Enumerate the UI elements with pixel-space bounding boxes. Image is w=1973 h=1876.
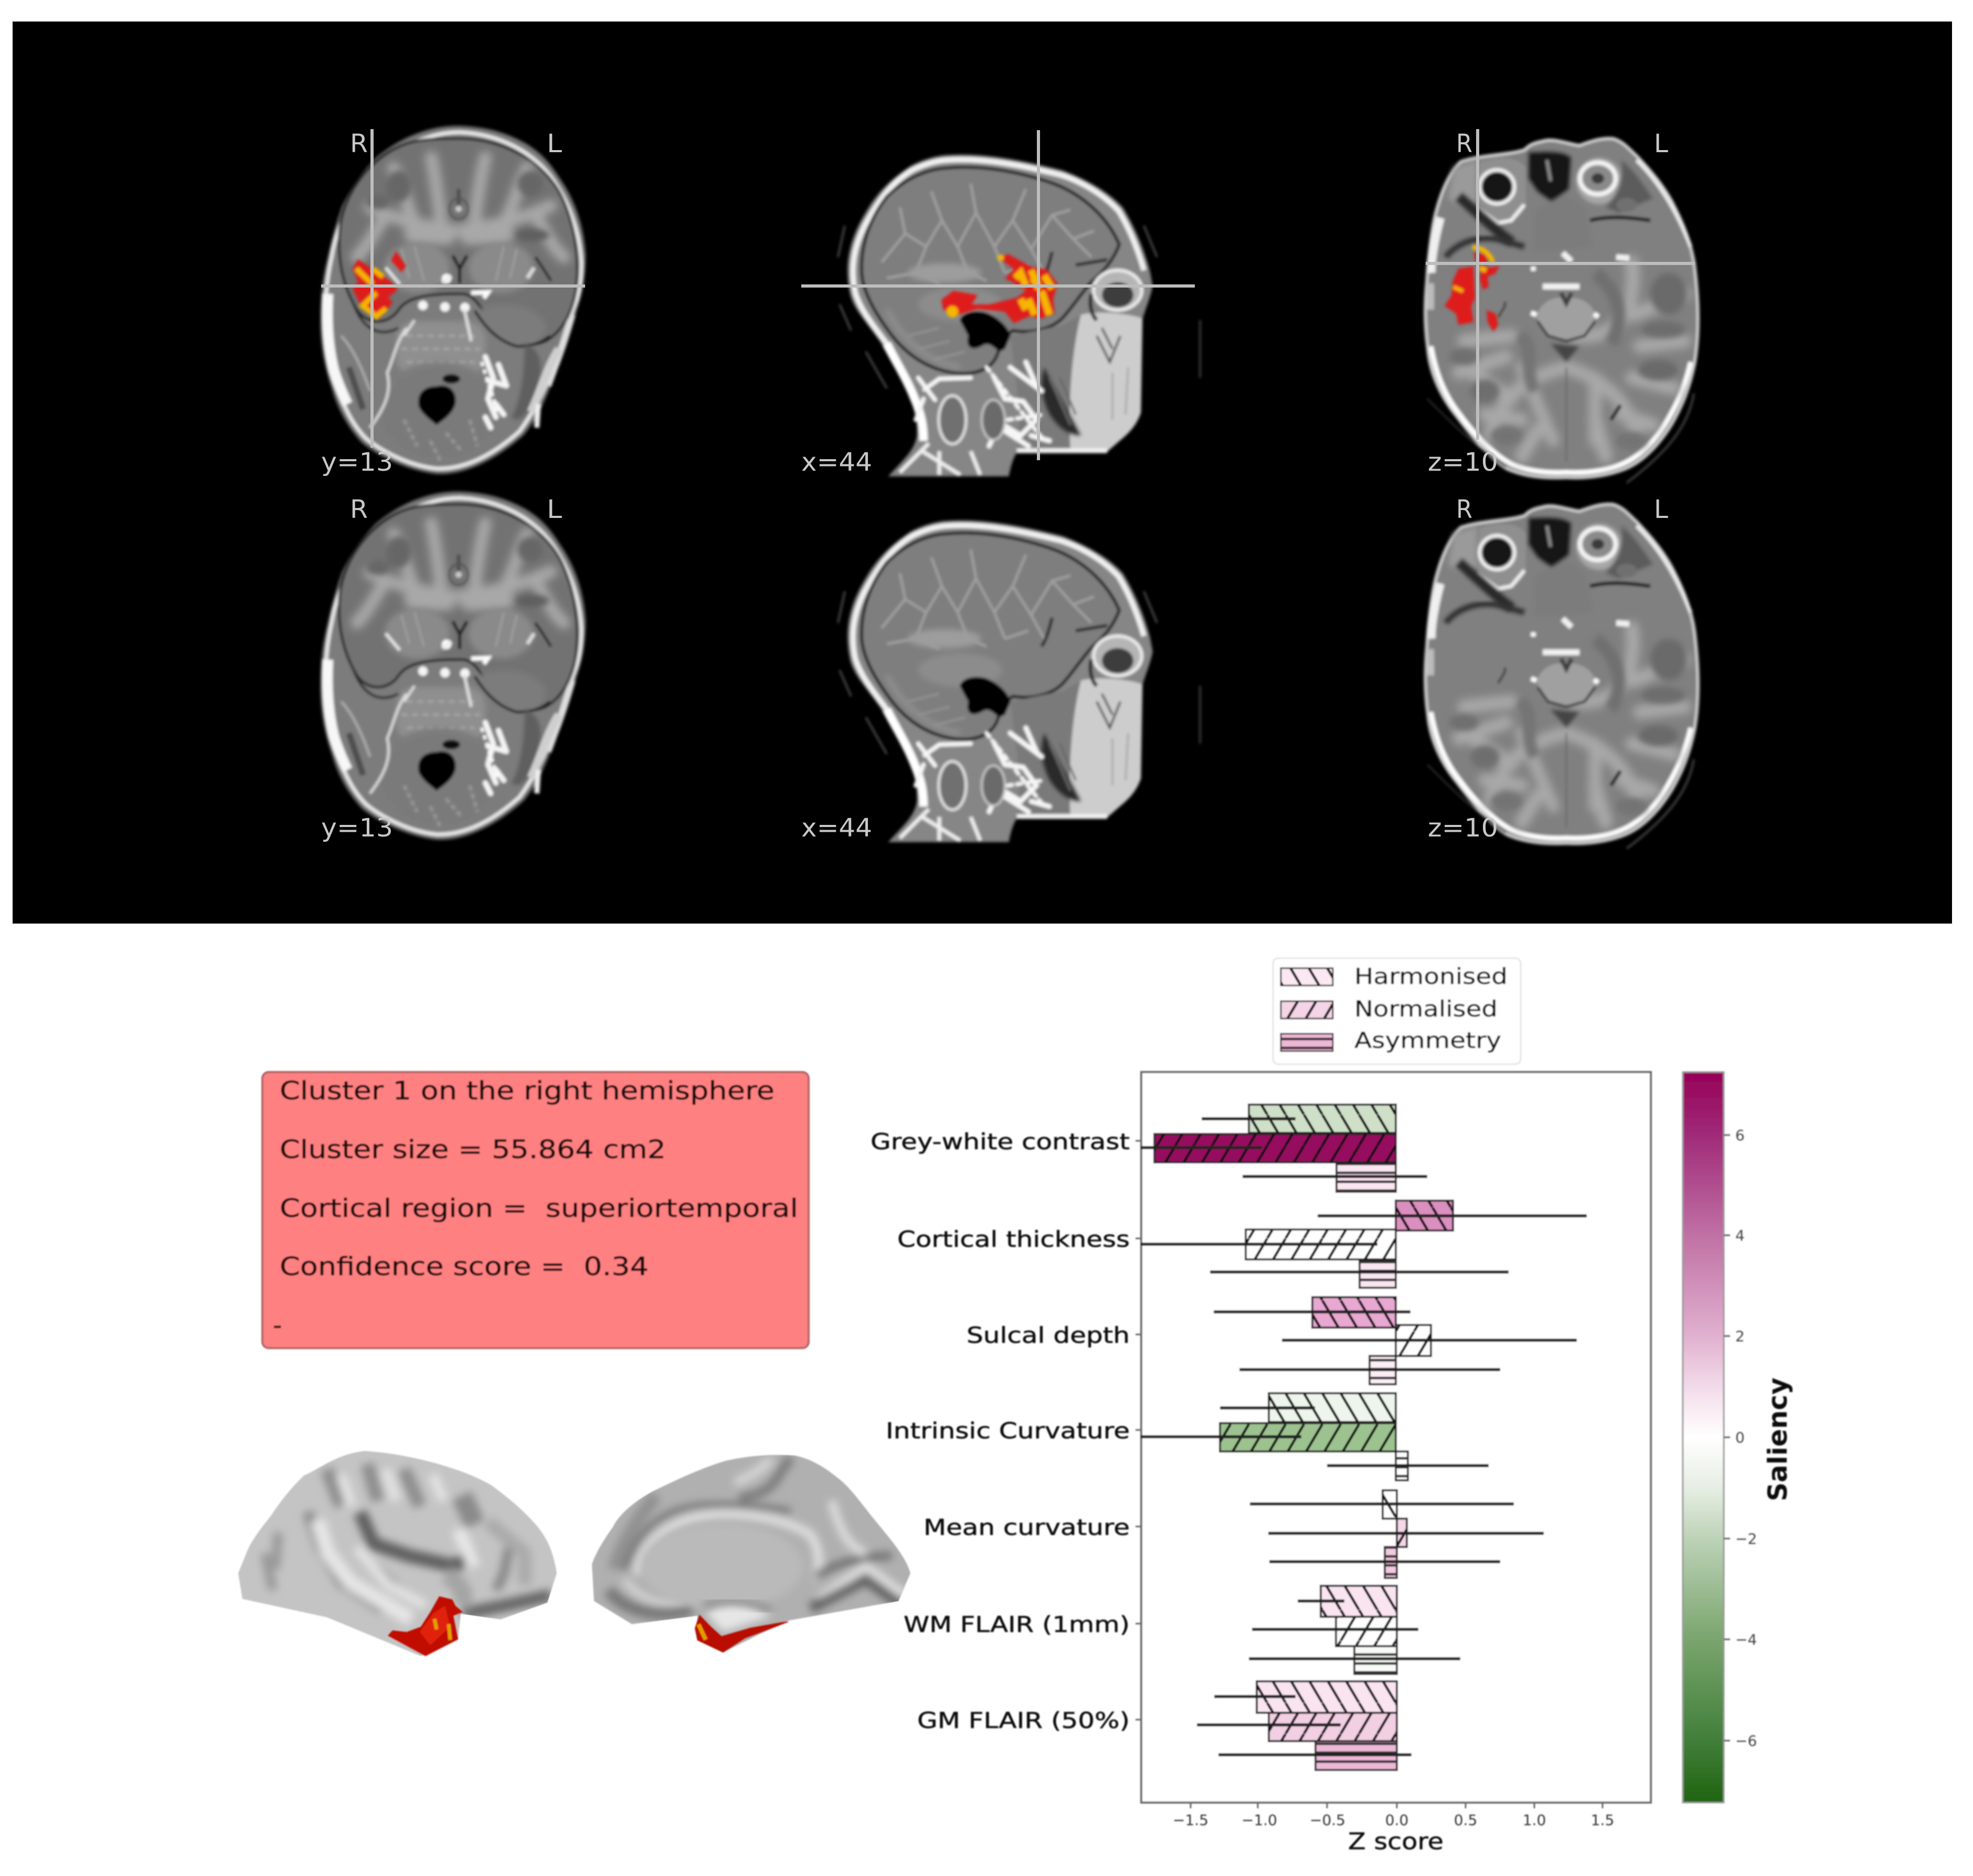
y axis labels: Cortical thickness: [897, 1226, 1130, 1252]
cluster text lines: Cluster size = 55.864 cm2: [280, 1135, 666, 1164]
orientation labels: R: [1456, 495, 1472, 524]
MRI axial clean: [1425, 495, 1698, 849]
legend swatch: Asymmetry: [1281, 1034, 1333, 1051]
colourbar tick labels: 6: [1735, 1127, 1745, 1144]
MRI coronal with overlay: [321, 126, 585, 477]
cluster text lines: Cortical region = superiortemporal: [280, 1194, 798, 1223]
cluster text lines: Cluster 1 on the right hemisphere: [280, 1076, 775, 1106]
slice label: x=44: [801, 813, 872, 843]
orientation labels: [321, 495, 562, 843]
feature group: Sulcal depth: [1214, 1297, 1577, 1384]
feature group: Cortical thickness: [1141, 1201, 1587, 1288]
cluster text lines: Confidence score = 0.34: [280, 1252, 649, 1281]
bar chart: [871, 1072, 1651, 1855]
feature group: GM FLAIR (50%): [1197, 1681, 1412, 1770]
MRI axial with overlay: [1425, 129, 1698, 483]
feature group: WM FLAIR (1mm): [1249, 1586, 1460, 1674]
x tick labels: [1173, 1811, 1614, 1829]
colourbar tick labels: −6: [1735, 1732, 1757, 1750]
crosshair lines: [801, 130, 1195, 460]
feature group: Grey-white contrast: [1141, 1105, 1427, 1192]
legend label: Asymmetry: Asymmetry: [1354, 1027, 1501, 1053]
x tick marks: [1191, 1803, 1603, 1808]
x tick labels: −0.5: [1310, 1811, 1345, 1829]
overlay: sagittal lesion cluster: [941, 254, 1057, 323]
legend label: Normalised: Normalised: [1354, 996, 1498, 1022]
MRI coronal clean: [321, 492, 585, 843]
x tick labels: −1.0: [1242, 1811, 1277, 1829]
orientation labels: L: [547, 129, 562, 158]
orientation labels: y=13: [321, 448, 393, 477]
legend: [1273, 958, 1521, 1064]
orientation labels: [1428, 495, 1668, 843]
lesion on medial surface: [695, 1615, 789, 1652]
cluster info box: [262, 1072, 809, 1348]
orientation labels: [321, 129, 562, 477]
orientation labels: L: [1654, 129, 1668, 158]
y axis labels: Intrinsic Curvature: [886, 1418, 1130, 1444]
overlay: coronal lesion cluster: [353, 251, 406, 320]
feature group: Intrinsic Curvature: [1141, 1393, 1489, 1480]
orientation labels: R: [1456, 129, 1472, 158]
colourbar tick labels: 2: [1735, 1328, 1745, 1345]
legend label: Harmonised: Harmonised: [1354, 963, 1508, 989]
overlay: axial lesion cluster: [1445, 248, 1500, 332]
MRI panel background: [13, 22, 1952, 924]
feature group: Mean curvature: [1250, 1490, 1544, 1578]
orientation labels: L: [1654, 495, 1668, 524]
x tick labels: 1.5: [1591, 1811, 1614, 1829]
lesion on lateral surface: [388, 1596, 463, 1656]
crosshair lines: [1426, 129, 1695, 440]
y axis labels: GM FLAIR (50%): [917, 1708, 1130, 1733]
x tick labels: 0.5: [1454, 1811, 1477, 1829]
x axis title: Z score: [1348, 1828, 1444, 1855]
y axis labels: [871, 1129, 1130, 1733]
orientation labels: z=10: [1428, 813, 1498, 843]
orientation labels: L: [547, 495, 562, 524]
orientation labels: R: [350, 129, 368, 158]
colourbar tick labels: −2: [1735, 1530, 1757, 1548]
y axis labels: WM FLAIR (1mm): [904, 1612, 1130, 1637]
MRI sagittal clean: [801, 521, 1200, 843]
legend swatch: Harmonised: [1281, 968, 1333, 985]
cluster text lines: -: [273, 1311, 282, 1340]
cluster text lines: [273, 1076, 798, 1340]
colourbar tick labels: 4: [1735, 1227, 1745, 1244]
MRI sagittal with overlay: [801, 130, 1200, 477]
brain surface medial view: [592, 1455, 910, 1652]
y tick marks: [1136, 1141, 1141, 1720]
colourbar tick labels: −4: [1735, 1631, 1757, 1648]
brain surface lateral view: [238, 1451, 557, 1656]
colourbar ticks: [1724, 1135, 1730, 1741]
orientation labels: R: [350, 495, 368, 524]
saliency colourbar: [1683, 1072, 1793, 1803]
orientation labels: [1428, 129, 1668, 477]
x tick labels: −1.5: [1173, 1811, 1208, 1829]
slice label: x=44: [801, 448, 872, 477]
crosshair lines: [321, 129, 585, 448]
y axis labels: Sulcal depth: [967, 1322, 1130, 1348]
orientation labels: z=10: [1428, 448, 1498, 477]
x tick labels: 1.0: [1523, 1811, 1546, 1829]
colourbar tick labels: [1735, 1127, 1757, 1750]
colourbar title: Saliency: [1763, 1377, 1793, 1501]
orientation labels: y=13: [321, 813, 393, 843]
y axis labels: Grey-white contrast: [871, 1129, 1130, 1154]
y axis labels: Mean curvature: [924, 1514, 1130, 1540]
colourbar tick labels: 0: [1735, 1429, 1745, 1446]
axes frame: [1141, 1072, 1651, 1803]
legend swatch: Normalised: [1281, 1001, 1333, 1019]
x tick labels: 0.0: [1385, 1811, 1408, 1829]
